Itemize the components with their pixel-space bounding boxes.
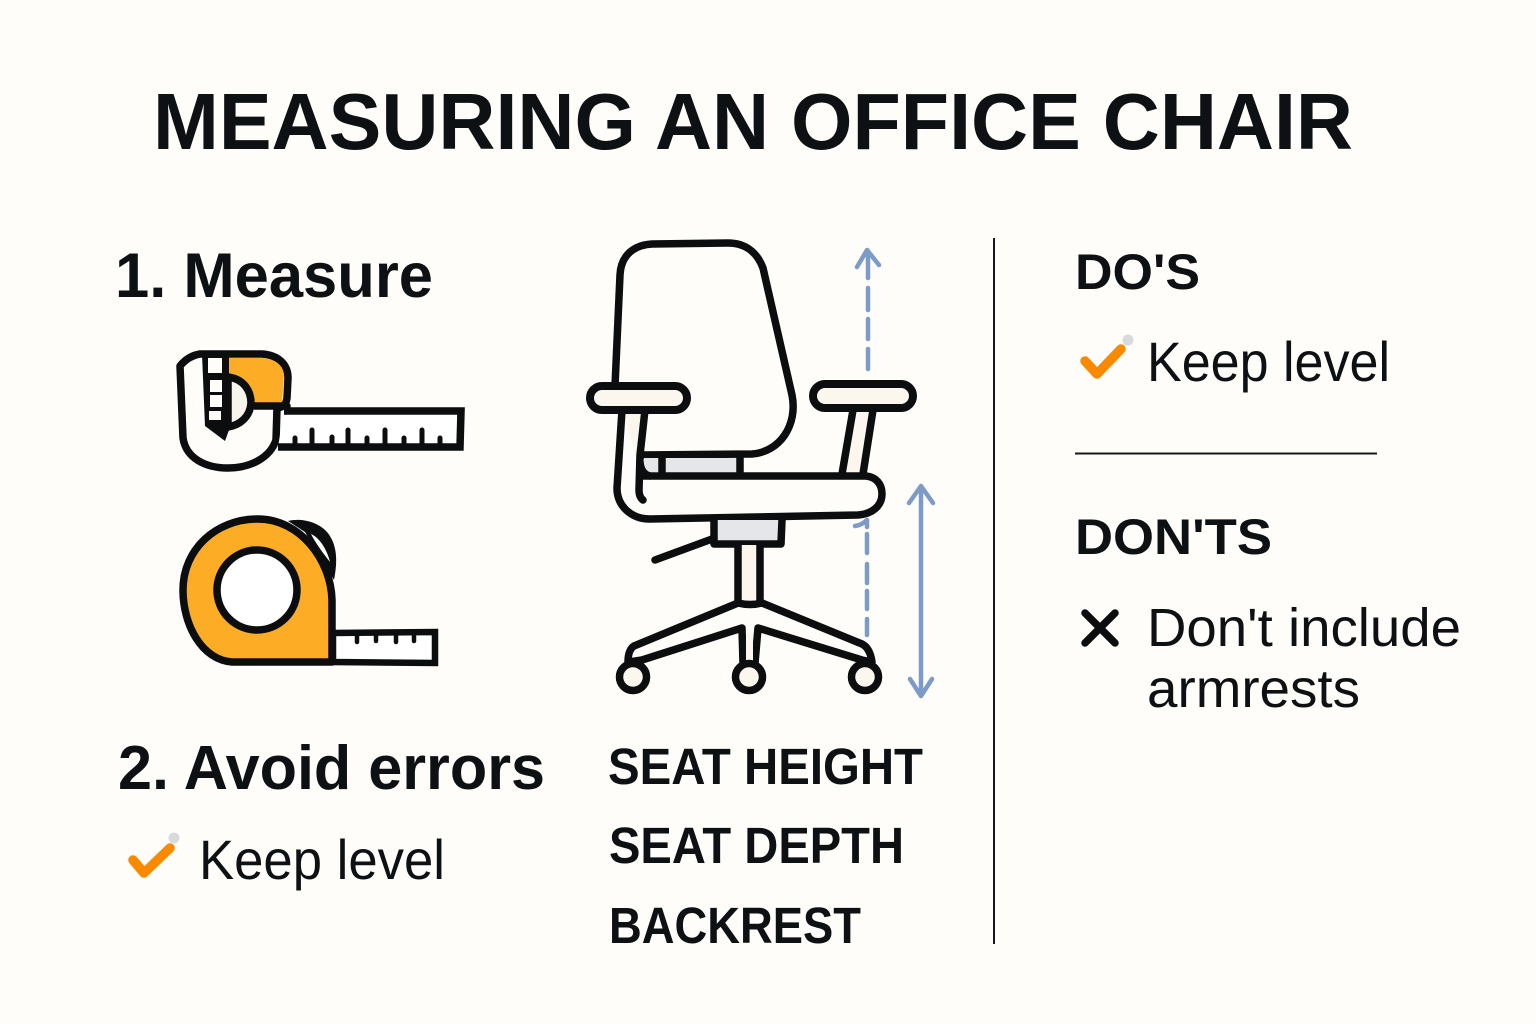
left armrest — [590, 386, 687, 410]
right armrest — [813, 384, 913, 408]
seat cushion — [617, 410, 882, 519]
don't item: armrests — [1085, 598, 1461, 719]
don't item: armrests: armrests — [1147, 659, 1360, 719]
right armrest post — [842, 408, 873, 474]
column — [738, 545, 760, 603]
icon: tape measure, bottom — [183, 519, 435, 663]
illustration: office chair — [590, 243, 913, 690]
do item: keep level: Keep level — [1147, 330, 1390, 393]
label: seat height: SEAT HEIGHT — [608, 738, 923, 795]
label: seat depth: SEAT DEPTH — [609, 817, 904, 874]
icon: cross — [1085, 613, 1115, 643]
arrow: solid seat height — [909, 486, 933, 696]
height lever — [655, 539, 712, 560]
heading: 1. Measure: 1. Measure — [115, 241, 433, 311]
title: MEASURING AN OFFICE CHAIR — [153, 77, 1353, 166]
arrow: dashed backrest height — [857, 250, 879, 369]
star base — [628, 603, 872, 663]
left armrest post — [617, 410, 645, 490]
seat bracket — [714, 520, 782, 544]
arrow: dashed seat height — [855, 520, 867, 635]
check item: keep level: Keep level — [199, 828, 445, 891]
don't item: armrests: Don't include — [1147, 598, 1461, 658]
label: backrest: BACKREST — [609, 897, 861, 954]
backrest — [615, 243, 793, 455]
gray lumbar panels — [644, 458, 737, 473]
heading: do's: DO'S — [1075, 244, 1200, 300]
icon: tape measure, top — [180, 354, 461, 468]
icon: orange check — [1085, 334, 1134, 374]
casters — [620, 664, 878, 690]
icon: orange check — [133, 832, 180, 873]
heading: don'ts: DON'TS — [1075, 509, 1272, 565]
heading: 2. Avoid errors: 2. Avoid errors — [118, 734, 545, 803]
